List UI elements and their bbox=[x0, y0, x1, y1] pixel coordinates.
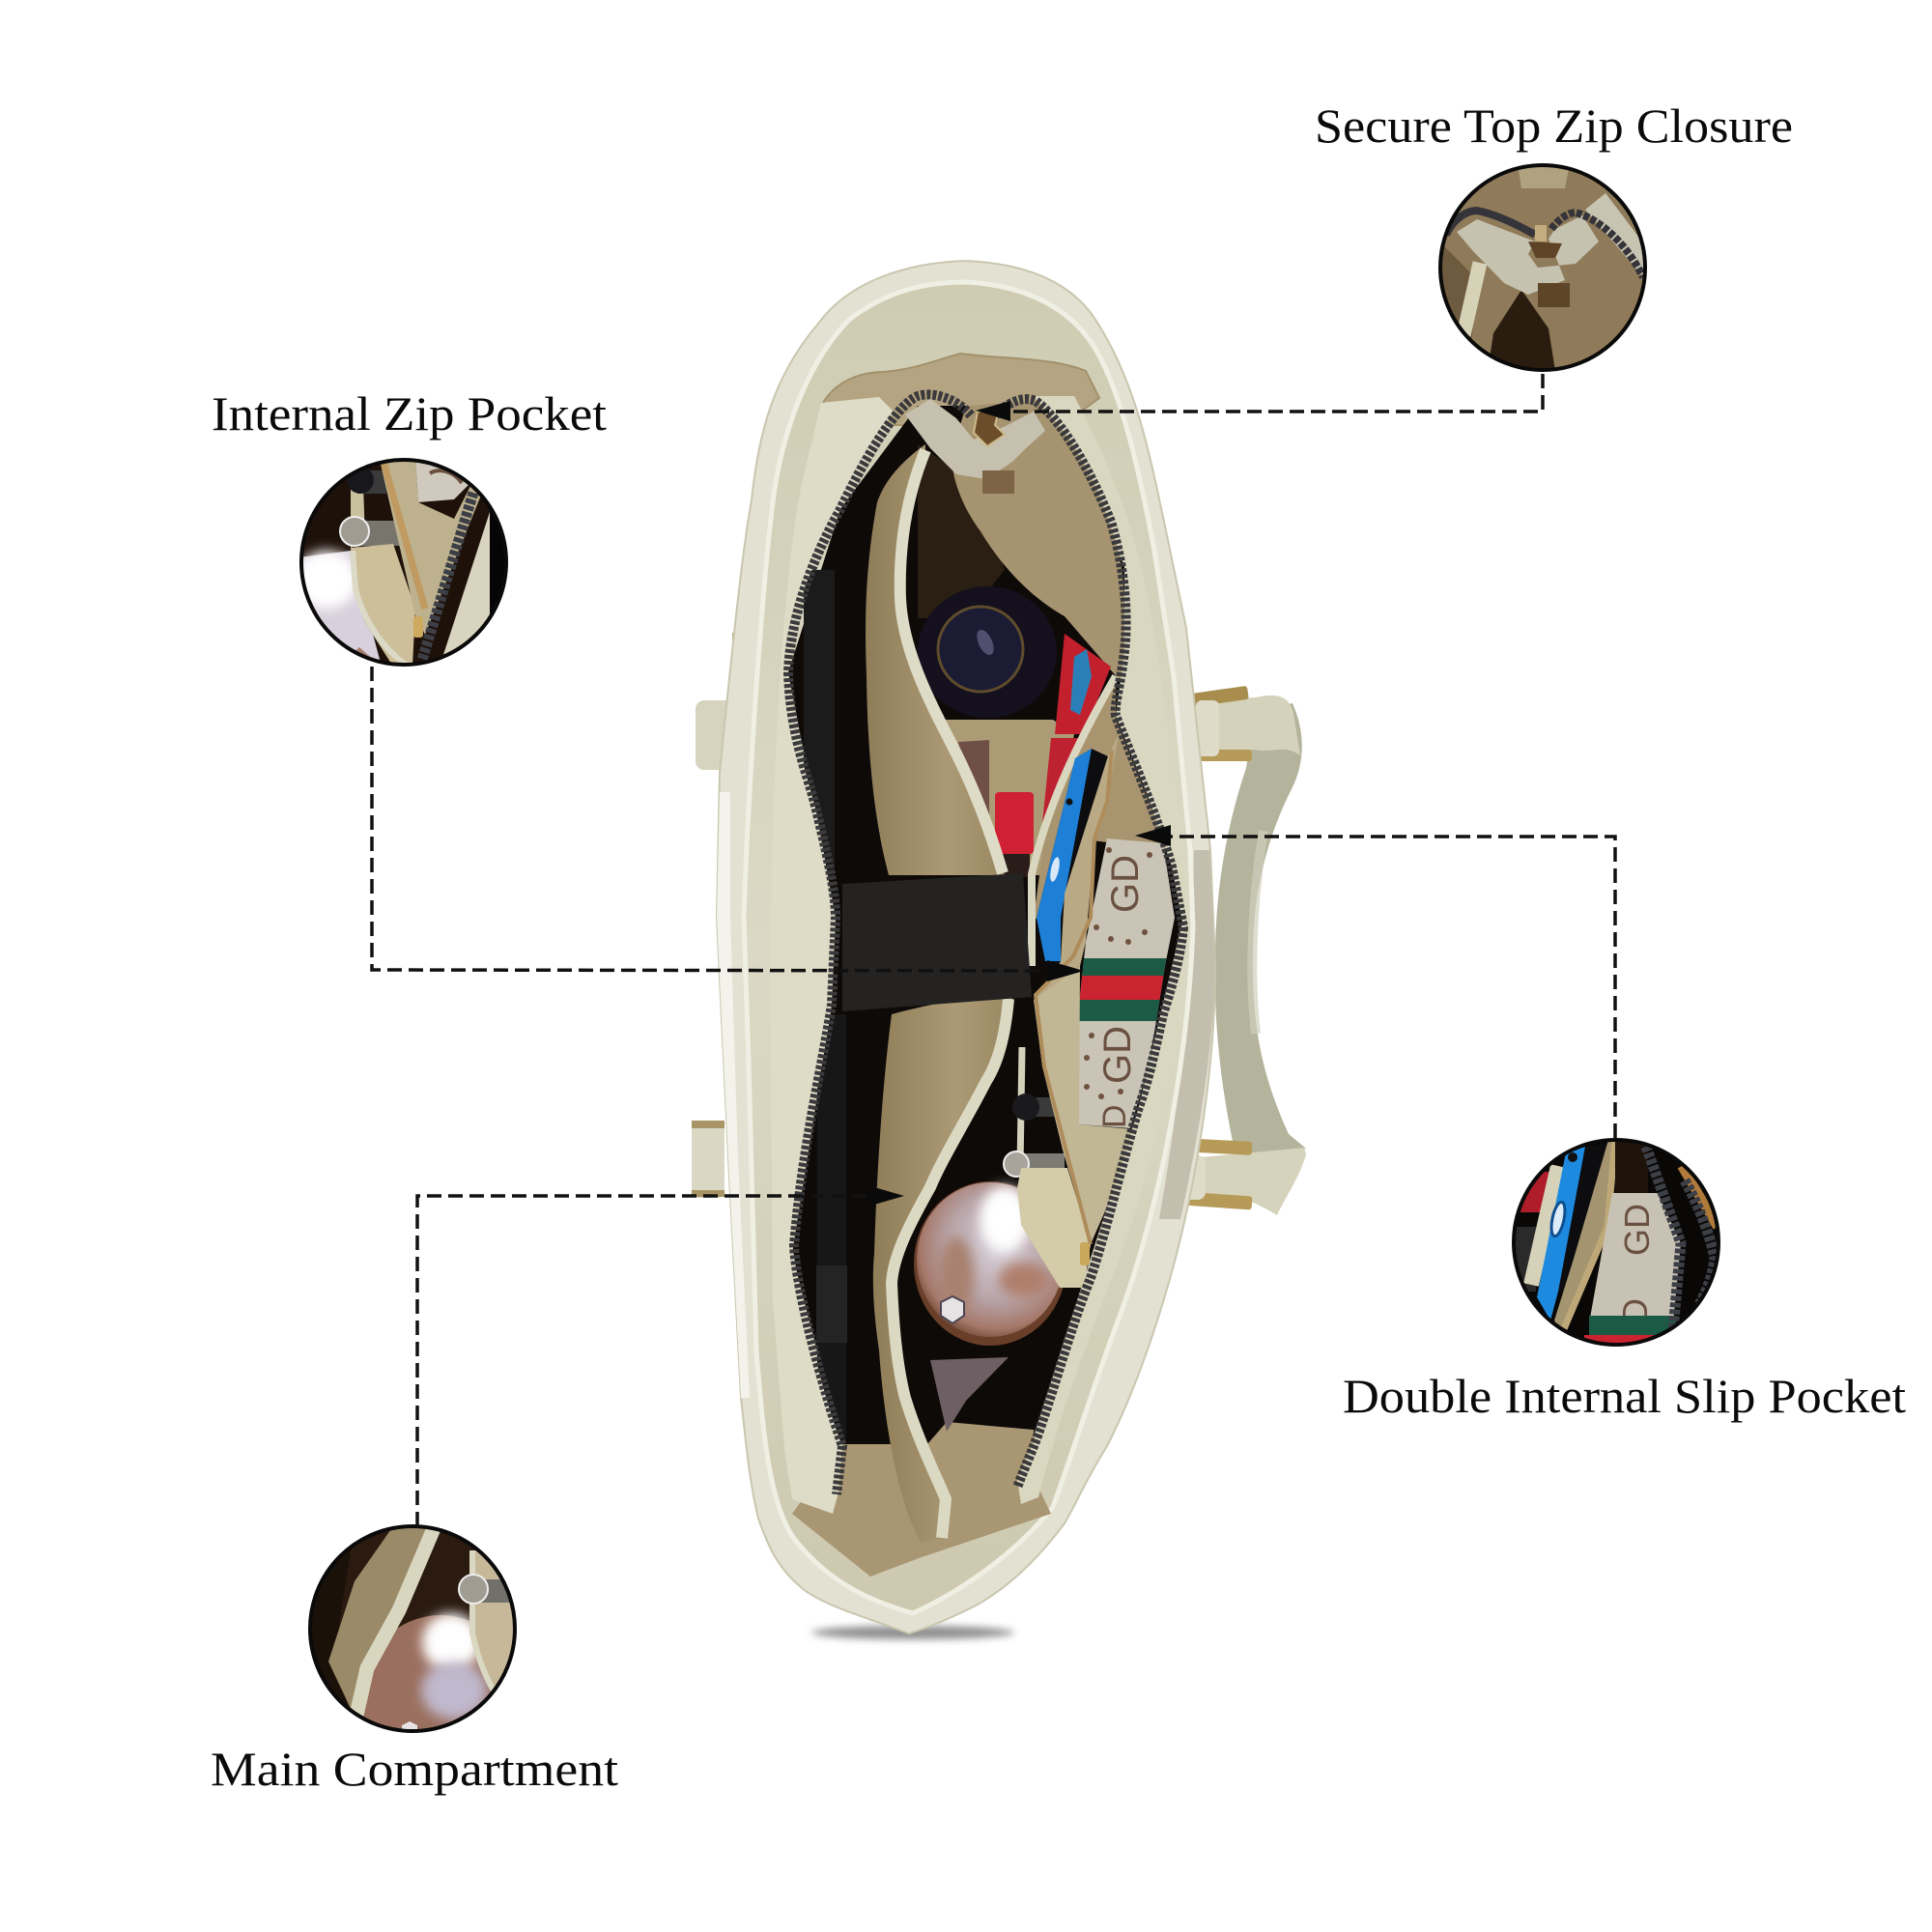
upper centre shadow fabric bbox=[918, 444, 1005, 618]
callout: Double Internal Slip Pocket bbox=[1135, 825, 1906, 1423]
brown lipstick bbox=[958, 740, 989, 816]
dark interior cavity bbox=[788, 406, 1183, 1488]
crumpled cloth bbox=[930, 1357, 1009, 1432]
heading: Double Internal Slip Pocket bbox=[1343, 1369, 1906, 1423]
tan lining above the pouch bbox=[1034, 681, 1169, 927]
heading: Main Compartment bbox=[211, 1742, 618, 1796]
callout: Internal Zip Pocket bbox=[212, 386, 1084, 981]
left side tabs bbox=[692, 633, 742, 1198]
red mascara bbox=[1041, 634, 1111, 833]
inner pocket edge bbox=[1032, 676, 1116, 966]
GD monogram pouch: GD bbox=[1104, 855, 1147, 913]
upper right lining fabric bbox=[952, 401, 1126, 686]
lower cream pocket bbox=[1017, 1168, 1091, 1288]
right cream panel bbox=[1017, 396, 1190, 1504]
detail circle bbox=[1513, 1140, 1720, 1347]
pocket zipper tape bbox=[1036, 751, 1112, 1244]
dashed connector bbox=[1009, 374, 1543, 412]
tan flap beside the phone bbox=[1036, 734, 1119, 999]
open handbag illustration bbox=[692, 261, 1306, 1634]
laptop inside left compartment bbox=[804, 570, 847, 1439]
pocket zipper pull bbox=[1080, 1242, 1090, 1265]
back lining under the cosmetics bbox=[942, 720, 1074, 875]
pouch stripes bbox=[1080, 958, 1167, 1021]
black elastic strap bbox=[842, 873, 1032, 1011]
red lipstick bbox=[995, 792, 1034, 877]
quilted fabric strip on the right bbox=[1159, 850, 1215, 1219]
perfume bottle bbox=[918, 586, 1057, 718]
near-white front panel highlight bbox=[717, 792, 750, 1398]
GD monogram pouch bbox=[1079, 838, 1175, 1128]
detail circle bbox=[310, 1526, 522, 1785]
callout: Secure Top Zip Closure bbox=[976, 99, 1793, 421]
pens and cream loop bbox=[1004, 1047, 1065, 1177]
detail circle bbox=[296, 460, 509, 667]
upper lining fabric bbox=[823, 354, 1099, 425]
zipper tape end bbox=[905, 399, 1045, 479]
detail circle: GD bbox=[1617, 1204, 1657, 1256]
arrowhead bbox=[1047, 960, 1084, 981]
copper flask lid bbox=[914, 1181, 1066, 1346]
zipper pull bbox=[974, 411, 1014, 494]
GD monogram pouch: D bbox=[1096, 1104, 1133, 1128]
lower lining fabric bbox=[792, 1422, 1051, 1577]
flap below the stripes bbox=[1034, 966, 1133, 1244]
smartphone bbox=[1037, 749, 1108, 966]
bag shadow bbox=[811, 1626, 1014, 1639]
dashed connector bbox=[1170, 837, 1615, 1138]
dashed connector bbox=[372, 667, 1048, 971]
heading: Internal Zip Pocket bbox=[212, 386, 607, 440]
arrowhead bbox=[976, 401, 1010, 421]
heading: Secure Top Zip Closure bbox=[1315, 99, 1793, 153]
upper pocket piping bbox=[900, 450, 1003, 873]
upper tan pocket bbox=[866, 444, 1005, 875]
callout: Main Compartment bbox=[211, 1185, 904, 1796]
lower pocket piping bbox=[892, 999, 1009, 1538]
lower tan pocket bbox=[873, 995, 1012, 1543]
outer shell bbox=[717, 261, 1215, 1634]
detail circle bbox=[1439, 164, 1646, 371]
left cream panel bbox=[771, 397, 894, 1514]
GD monogram pouch: GD bbox=[1096, 1026, 1139, 1084]
arrowhead bbox=[1135, 825, 1171, 846]
detail circle: D bbox=[1615, 1298, 1655, 1323]
inner wall bbox=[744, 282, 1193, 1613]
dashed connector bbox=[417, 1196, 867, 1526]
right carry handle bbox=[1179, 686, 1306, 1215]
main zipper right side bbox=[995, 399, 1183, 1488]
main zipper left side bbox=[788, 394, 971, 1494]
arrowhead bbox=[867, 1185, 904, 1207]
